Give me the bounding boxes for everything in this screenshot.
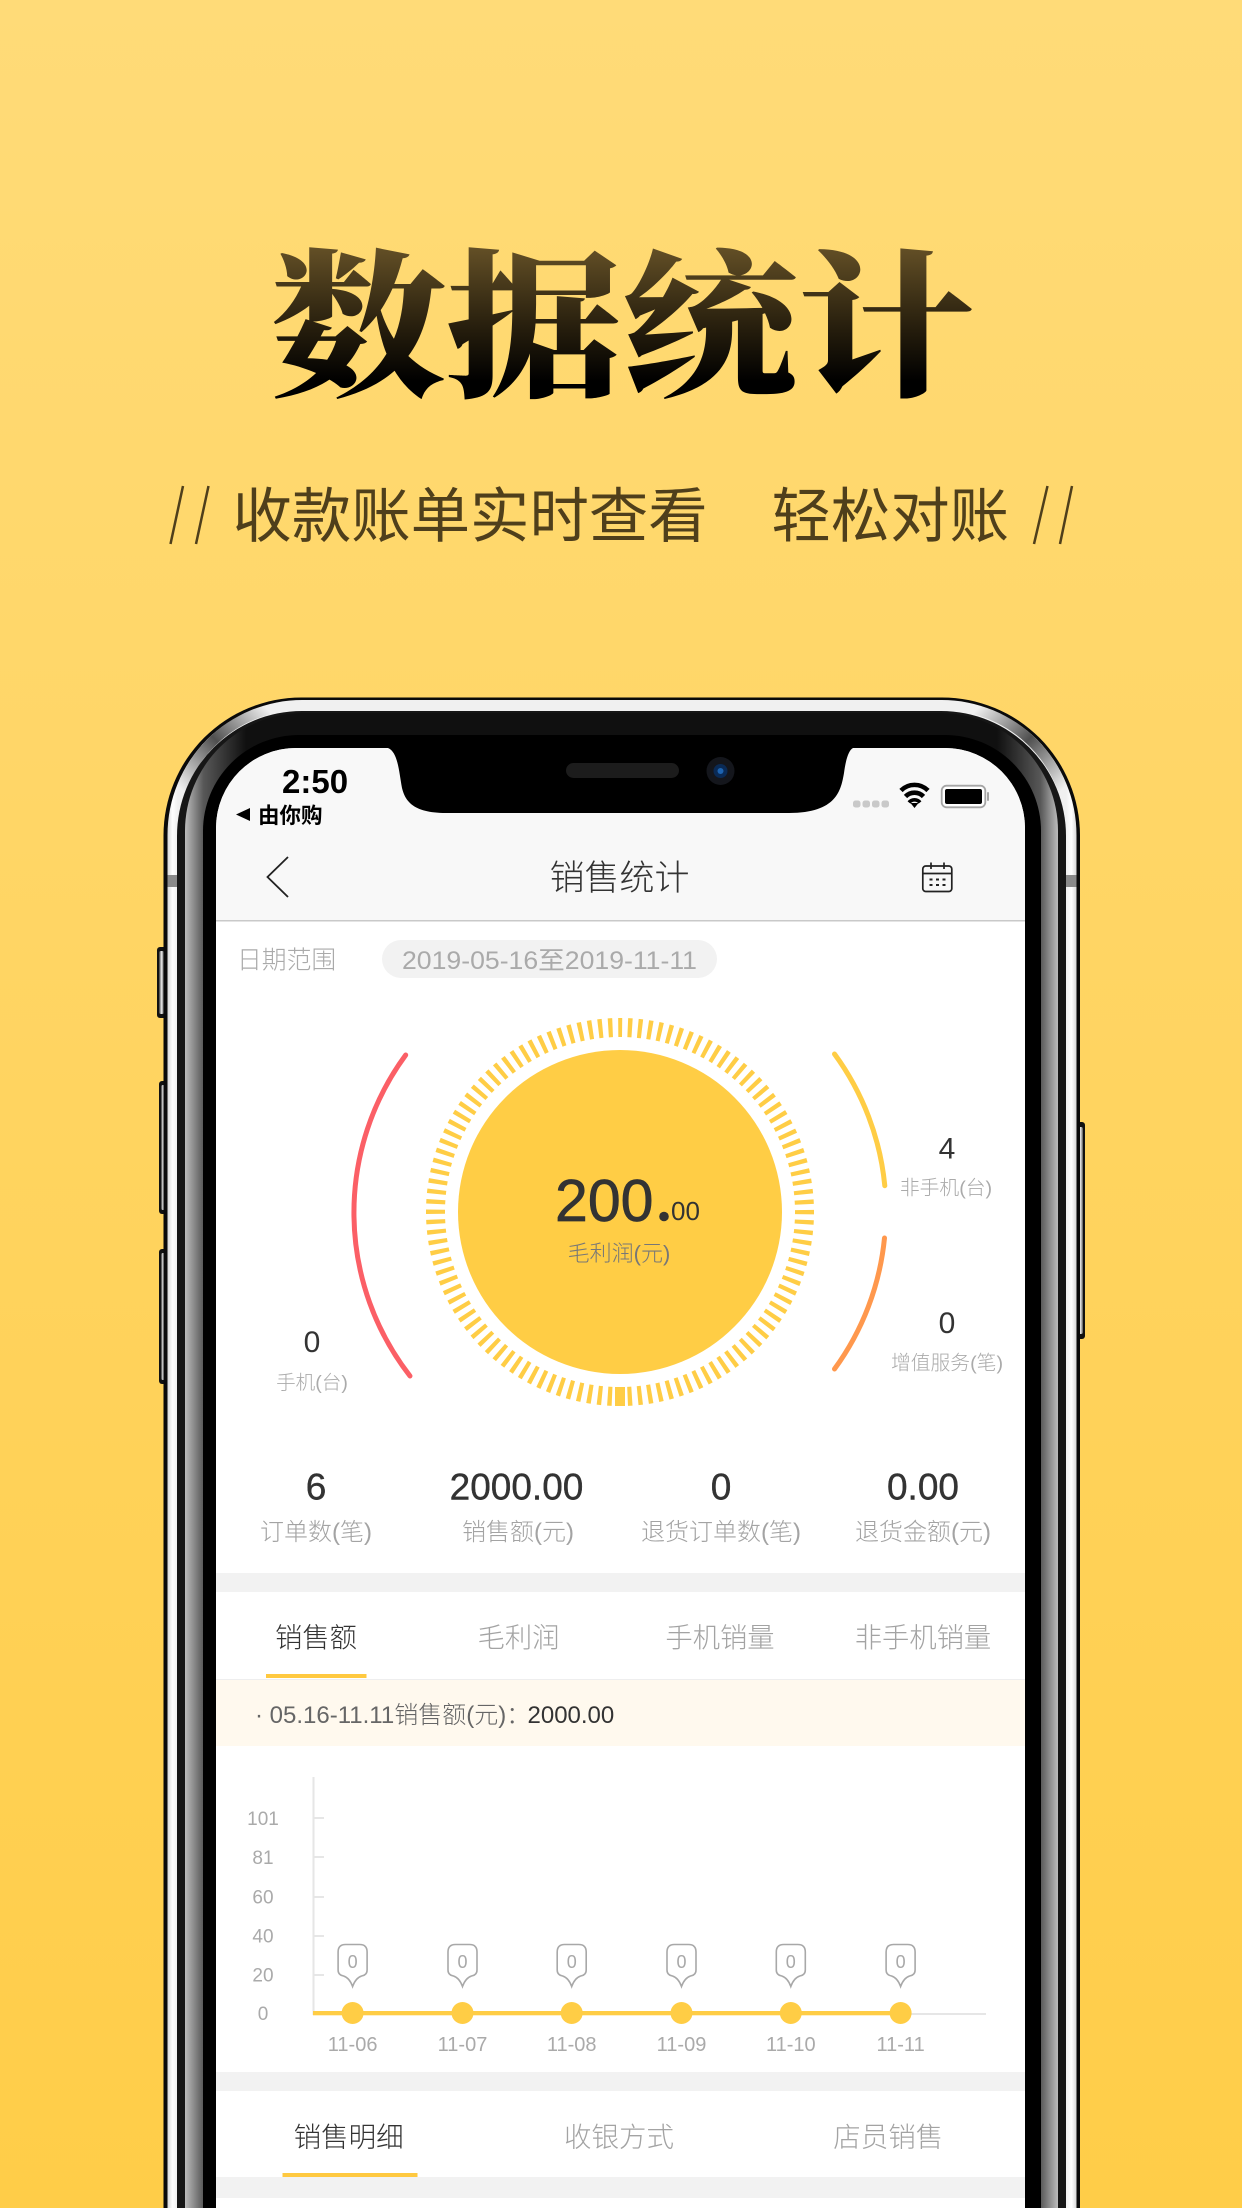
page title: 销售统计 (549, 859, 690, 898)
data point 11-11 (877, 1944, 925, 2056)
active tab: 销售额 (275, 1622, 357, 1653)
phone (157, 698, 1085, 2208)
active tab: 销售明细 (294, 2122, 404, 2152)
chart tabs (266, 1622, 991, 1678)
stat: return amount (855, 1466, 991, 1546)
data point 11-09: 0 (676, 1952, 687, 1972)
line chart (247, 1777, 986, 2056)
date range (237, 940, 717, 978)
camera (706, 757, 734, 785)
speaker (566, 763, 679, 778)
date value: 2019-05-16至2019-11-11 (402, 947, 697, 975)
profit label: 毛利润(元) (568, 1241, 670, 1266)
summary banner (216, 1679, 1025, 1746)
arc: non-phones (834, 1054, 885, 1186)
stat: non-phones: 非手机(台) (900, 1178, 992, 1200)
nav divider (216, 920, 1025, 922)
stat: phones: 0 (304, 1326, 320, 1359)
stat: sales (450, 1466, 583, 1546)
stat: non-phones (900, 1132, 992, 1200)
active underline (266, 1674, 366, 1678)
y labels: 60 (252, 1888, 274, 1908)
y labels: 40 (252, 1926, 274, 1948)
back indicator (236, 808, 250, 821)
stat: orders: 订单数(笔) (260, 1519, 372, 1546)
tab: 毛利润 (478, 1622, 559, 1653)
data point 11-08 (547, 1944, 597, 2056)
y labels: 101 (247, 1809, 279, 1830)
stat: return orders (641, 1466, 801, 1546)
stat: value-added: 增值服务(笔) (891, 1352, 1003, 1374)
data point 11-11: 11-11 (877, 2034, 925, 2056)
phone side buttons (157, 947, 1085, 1384)
stat: return orders: 退货订单数(笔) (641, 1519, 801, 1546)
stat: value-added (891, 1307, 1003, 1374)
title: 数据统计 (270, 242, 974, 419)
y labels: 0 (258, 2004, 268, 2025)
slashes: right (1034, 486, 1072, 544)
banner text: · 05.16-11.11销售额(元)： (255, 1702, 530, 1729)
arc: value-added (834, 1238, 884, 1369)
data point 11-06 (328, 1944, 377, 2056)
screen (216, 748, 1025, 2208)
signal dots (853, 800, 889, 808)
nav background (216, 748, 1025, 920)
stat: return amount: 0.00 (887, 1466, 959, 1508)
y ticks (313, 1818, 324, 1975)
stat: sales: 2000.00 (450, 1466, 583, 1508)
profit value (555, 1168, 700, 1234)
active underline (282, 2173, 418, 2177)
banner value: 2000.00 (528, 1702, 614, 1729)
detail tabs (282, 2122, 943, 2177)
stat: return orders: 0 (711, 1466, 731, 1508)
tick ring (436, 1028, 804, 1396)
stat: non-phones: 4 (939, 1132, 955, 1166)
data point 11-07 (438, 1944, 487, 2056)
stat: phones: 手机(台) (276, 1372, 348, 1394)
data point 11-10: 0 (786, 1952, 796, 1972)
status bar (236, 763, 989, 828)
data point 11-07: 0 (457, 1952, 468, 1972)
slashes: left (170, 486, 208, 544)
data point 11-08: 11-08 (547, 2034, 597, 2056)
date label: 日期范围 (237, 946, 336, 974)
y labels: 81 (252, 1848, 274, 1869)
phone frame (164, 698, 1080, 2208)
data point 11-10: 11-10 (766, 2034, 816, 2056)
axes (314, 1777, 986, 2014)
profit value: 00 (671, 1196, 700, 1226)
data line (313, 2011, 901, 2015)
stat: return amount: 退货金额(元) (855, 1519, 991, 1546)
calendar icon (923, 862, 952, 892)
y labels: 20 (252, 1966, 274, 1986)
date pill (382, 940, 717, 978)
arc: phones (354, 1055, 410, 1376)
tab: 非手机销量 (855, 1622, 991, 1653)
stat: sales: 销售额(元) (462, 1519, 574, 1546)
subtitle text: left: 收款账单实时查看 (232, 483, 708, 550)
bottom tick (615, 1387, 625, 1406)
notch (386, 746, 855, 813)
data point 11-08: 0 (567, 1952, 577, 1972)
data point 11-09 (657, 1944, 706, 2056)
profit value: 200 (555, 1168, 653, 1234)
wifi (901, 785, 928, 808)
tab: 手机销量 (665, 1622, 775, 1653)
y labels (247, 1809, 279, 2025)
data point 11-06: 0 (348, 1952, 358, 1972)
carrier: 由你购 (258, 804, 323, 828)
section gap (216, 1573, 1025, 1592)
data point 11-06: 11-06 (328, 2034, 377, 2056)
subtitle (170, 483, 1072, 550)
battery (942, 786, 989, 807)
time: 2:50 (282, 763, 348, 800)
nav bar (216, 857, 1025, 922)
section gap (216, 2072, 1025, 2091)
back arrow (268, 857, 288, 897)
stat: orders (260, 1466, 372, 1546)
data point 11-09: 11-09 (657, 2034, 706, 2056)
bottom gap (216, 2177, 1025, 2198)
stat: phones (276, 1326, 348, 1394)
subtitle text: right: 轻松对账 (772, 483, 1009, 550)
stat: orders: 6 (306, 1466, 326, 1508)
data point 11-11: 0 (896, 1952, 906, 1972)
data point 11-10 (766, 1944, 816, 2056)
data point 11-07: 11-07 (438, 2034, 487, 2056)
stat: value-added: 0 (939, 1307, 955, 1340)
tab: 店员销售 (833, 2122, 943, 2152)
summary stats (260, 1466, 991, 1546)
gauge (276, 1028, 1003, 1406)
tab: 收银方式 (564, 2122, 674, 2152)
core circle (458, 1050, 782, 1374)
